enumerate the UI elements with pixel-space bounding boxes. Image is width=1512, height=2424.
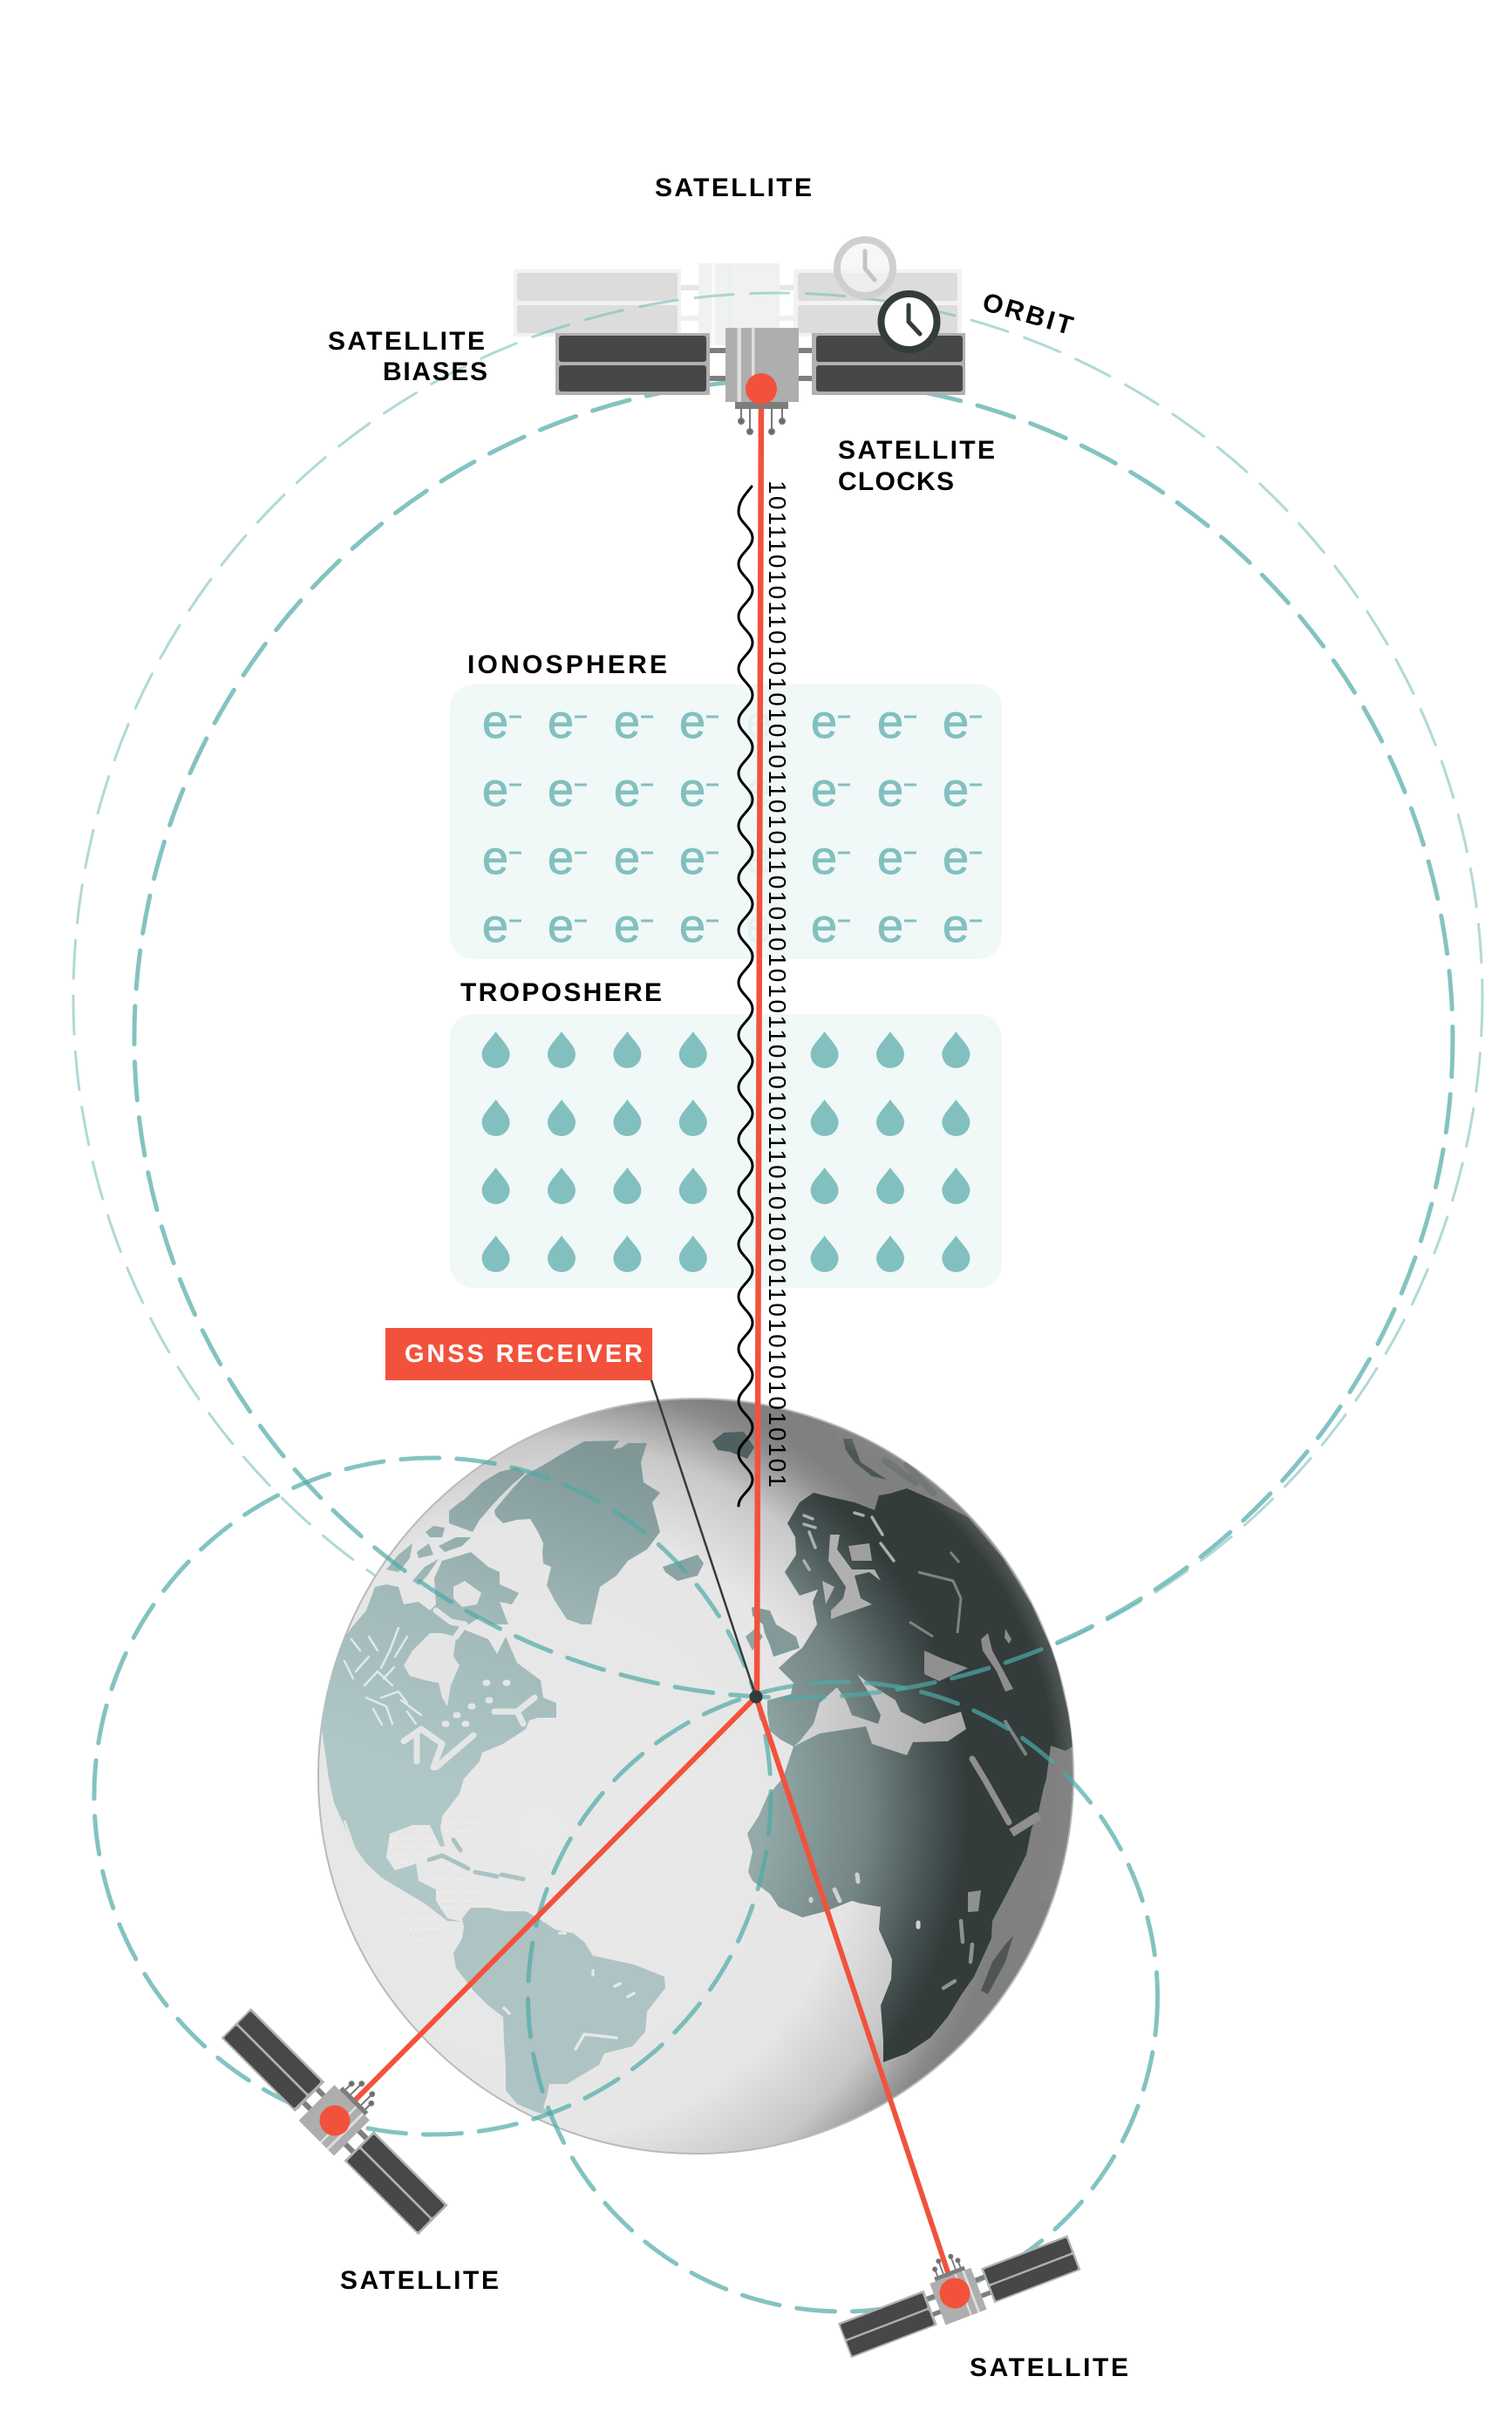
electrons grid xyxy=(482,696,969,952)
rivers xyxy=(909,1552,961,1637)
Norwegian lakes xyxy=(804,1513,894,1569)
label: satellite clocks: SATELLITE xyxy=(838,436,995,465)
electrons grid: e xyxy=(679,900,705,952)
electrons grid: e xyxy=(614,832,640,884)
faint electrons behind signal: e xyxy=(746,696,772,748)
Siberian islands xyxy=(885,1461,933,1493)
ghost satellite: previous position xyxy=(514,263,962,345)
South American rivers and lakes xyxy=(504,1933,634,2049)
electron charge marks xyxy=(509,717,982,921)
faint electrons behind signal: e xyxy=(746,832,772,884)
electrons grid: e xyxy=(482,764,508,816)
faint electrons behind signal: e xyxy=(746,900,772,952)
binary signal text: 101110101101010101011010110101010101101010111010101011010101010101 xyxy=(764,480,791,1488)
orbit: light outer orbit xyxy=(73,293,1482,1702)
continent: Svalbard xyxy=(712,1432,754,1459)
lower right satellite xyxy=(829,2213,1082,2361)
continent: Iceland xyxy=(663,1555,704,1581)
faint electrons behind signal: e xyxy=(746,764,772,816)
Mediterranean Sea xyxy=(793,1674,966,1755)
electrons grid: e xyxy=(679,832,705,884)
electrons grid: e xyxy=(811,696,837,748)
label: GNSS receiver: GNSS RECEIVER xyxy=(405,1340,643,1368)
electrons grid: e xyxy=(877,696,903,748)
right solar panel xyxy=(812,333,965,395)
Baltic Sea xyxy=(828,1535,881,1619)
signal wave xyxy=(739,487,753,1506)
water drops grid xyxy=(482,1032,970,1272)
electrons grid: e xyxy=(482,900,508,952)
panel: ionosphere xyxy=(450,684,1002,959)
continent: Great Britain xyxy=(752,1607,800,1657)
lower left satellite xyxy=(219,1989,467,2237)
signal origin: lower left satellite xyxy=(319,2105,351,2136)
electrons grid: e xyxy=(943,696,969,748)
Persian Gulf xyxy=(1005,1720,1026,1755)
label: satellite biases: SATELLITE xyxy=(328,327,485,356)
Red Sea xyxy=(972,1759,1009,1822)
icon: faded clock xyxy=(837,240,893,296)
Baja California xyxy=(344,1821,355,1850)
northern channels xyxy=(436,1610,465,1637)
orbit: lower left satellite xyxy=(94,1458,771,2135)
continent: Ireland xyxy=(746,1628,763,1651)
signal origin xyxy=(746,373,777,405)
base plate xyxy=(735,402,788,409)
Hudson Bay xyxy=(404,1633,460,1706)
Aral Sea xyxy=(1005,1629,1011,1644)
Madagascar xyxy=(981,1936,1013,1994)
Black Sea xyxy=(924,1651,968,1681)
orbit: lower right satellite xyxy=(528,1682,1158,2312)
electrons grid: e xyxy=(614,900,640,952)
icon: satellite clock xyxy=(881,294,936,350)
African lakes xyxy=(968,1890,981,1912)
label: troposphere: TROPOSHERE xyxy=(460,978,662,1007)
electrons grid: e xyxy=(877,832,903,884)
electrons grid: e xyxy=(943,900,969,952)
label: satellite biases xyxy=(328,327,487,386)
electrons grid: e xyxy=(943,764,969,816)
land masses xyxy=(320,1413,1081,2116)
Caspian Sea xyxy=(981,1633,1013,1692)
label: lower right satellite: SATELLITE xyxy=(970,2353,1128,2382)
Caribbean islands xyxy=(429,1840,523,1879)
continent: Arctic islands xyxy=(386,1467,525,1585)
receiver point xyxy=(750,1690,762,1704)
electrons grid: e xyxy=(482,832,508,884)
label: GNSS receiver xyxy=(385,1328,652,1380)
signal origin: lower right satellite xyxy=(940,2278,970,2309)
continent: South America xyxy=(453,1908,665,2116)
continent: Greenland xyxy=(494,1440,660,1624)
electrons grid: e xyxy=(548,764,574,816)
Gulf of Mexico stipple xyxy=(391,1822,493,1939)
orbit: main satellite orbit xyxy=(134,379,1453,1698)
electrons grid: e xyxy=(943,832,969,884)
body xyxy=(725,328,799,402)
electrons grid: e xyxy=(877,764,903,816)
signal path: lower left satellite to receiver xyxy=(335,1697,756,2121)
Canadian lakes xyxy=(344,1628,421,1725)
electrons grid: e xyxy=(877,900,903,952)
label: satellite biases: BIASES xyxy=(383,357,487,386)
antennas xyxy=(739,409,785,434)
panel: troposphere xyxy=(450,1014,1002,1288)
left solar panel xyxy=(555,333,710,395)
rim shading on the dark side xyxy=(837,1413,1081,1901)
electrons grid: e xyxy=(679,764,705,816)
eastern Canadian lakes xyxy=(445,1683,507,1724)
signal path: top satellite to receiver xyxy=(757,389,761,1697)
label: satellite: SATELLITE xyxy=(655,174,812,202)
label: satellite clocks: CLOCKS xyxy=(838,467,954,496)
continent: Novaya Zemlya xyxy=(843,1439,887,1480)
faint electrons behind signal xyxy=(746,696,772,952)
label: satellite clocks xyxy=(838,436,995,496)
globe xyxy=(318,1399,1081,2154)
electrons grid: e xyxy=(482,696,508,748)
electrons grid: e xyxy=(548,696,574,748)
signal path: lower right satellite to receiver xyxy=(756,1697,955,2293)
label: lower left satellite: SATELLITE xyxy=(340,2266,499,2295)
electrons grid: e xyxy=(548,832,574,884)
electrons grid: e xyxy=(548,900,574,952)
St Lawrence and Great Lakes xyxy=(404,1698,535,1767)
label: ionosphere: IONOSPHERE xyxy=(467,650,667,679)
Skagerrak xyxy=(822,1581,834,1604)
electrons grid: e xyxy=(614,764,640,816)
electrons grid: e xyxy=(811,900,837,952)
Russian lakes xyxy=(848,1543,872,1561)
leader line: GNSS receiver xyxy=(650,1378,756,1697)
connectors xyxy=(710,348,812,381)
continent: North America xyxy=(320,1552,556,1922)
top satellite xyxy=(555,328,965,434)
African rift lakes xyxy=(943,1921,972,1988)
electrons grid: e xyxy=(679,696,705,748)
electrons grid: e xyxy=(614,696,640,748)
continent: Eurasia and Africa xyxy=(747,1488,1077,2062)
electrons grid: e xyxy=(811,764,837,816)
electrons grid: e xyxy=(811,832,837,884)
label: orbit: ORBIT xyxy=(979,288,1076,341)
West African lakes xyxy=(811,1875,918,1927)
Gulf of Aden xyxy=(1011,1815,1039,1833)
Foxe Basin xyxy=(453,1581,481,1607)
